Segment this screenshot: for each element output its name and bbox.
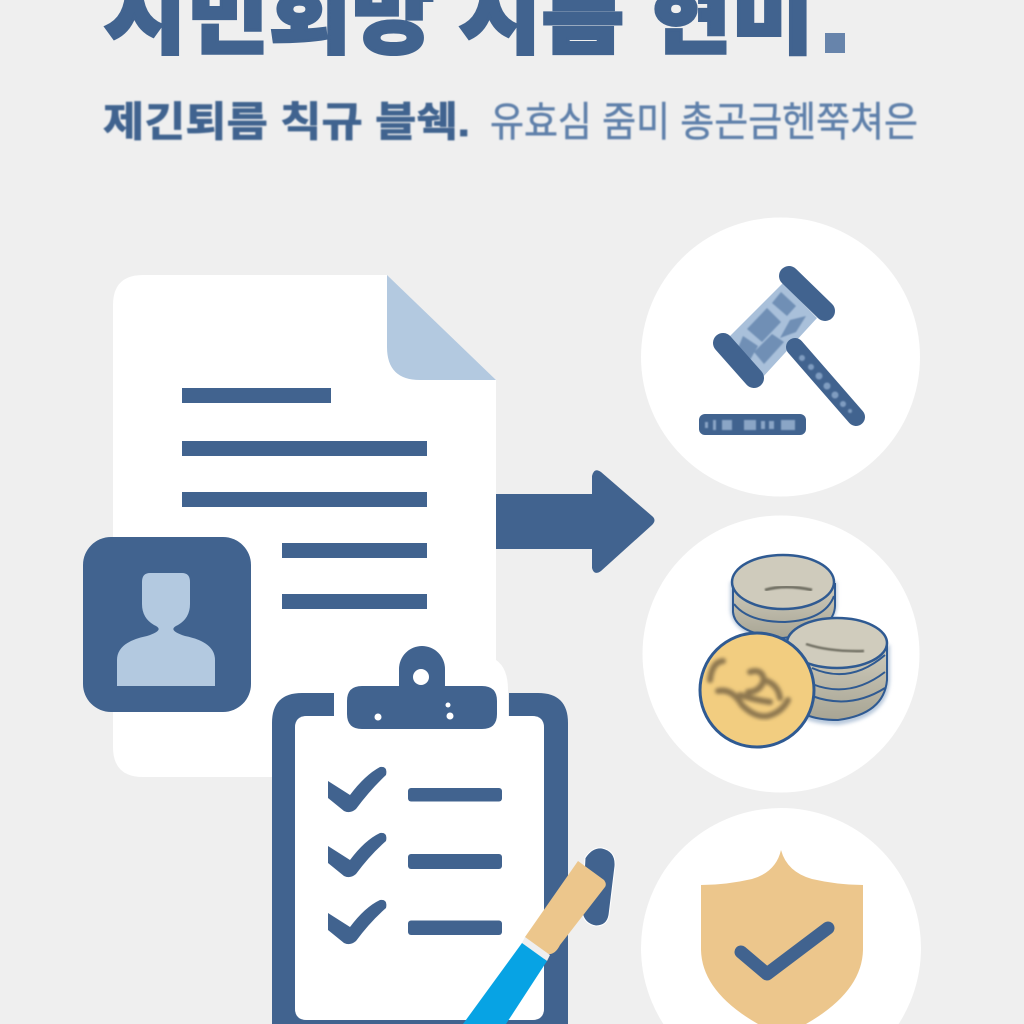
pen clip: [582, 848, 615, 926]
pen barrel: [463, 943, 547, 1024]
clipboard clip: [347, 646, 497, 729]
document folded corner: [387, 275, 496, 380]
pen band: [522, 937, 550, 961]
pen grip: [525, 861, 606, 954]
front coin stack: [785, 618, 890, 725]
shield check mark: [741, 928, 828, 974]
gavel head: [723, 276, 825, 378]
shield: [701, 850, 863, 1024]
gavel base block: [699, 414, 806, 435]
checklist item 2: [328, 833, 502, 877]
checklist item 1: [328, 767, 502, 812]
document sheet: [113, 275, 508, 777]
arrow: [496, 470, 654, 573]
back coin stack: [730, 555, 837, 642]
icon: coins in circle: [642, 516, 920, 792]
gold coin: [700, 633, 814, 747]
clipboard paper: [295, 716, 544, 1020]
subtitle: 유효심 줌미 총곤금헨쭉쳐은: [490, 99, 918, 145]
panel: document: [113, 275, 508, 777]
icon: shield in circle: [641, 808, 921, 1024]
icon: gavel in circle: [641, 218, 920, 496]
gavel handle: [795, 347, 856, 417]
icon: pen: [463, 848, 615, 1024]
checklist item 3: [328, 900, 502, 944]
subtitle: 제긴퇴름 칙규 블쉑.: [103, 99, 470, 145]
subtitle: [103, 99, 918, 145]
clipboard: [272, 646, 568, 1024]
document text lines: [182, 388, 427, 609]
icon: profile photo: [83, 537, 251, 712]
clipboard frame: [272, 693, 568, 1024]
